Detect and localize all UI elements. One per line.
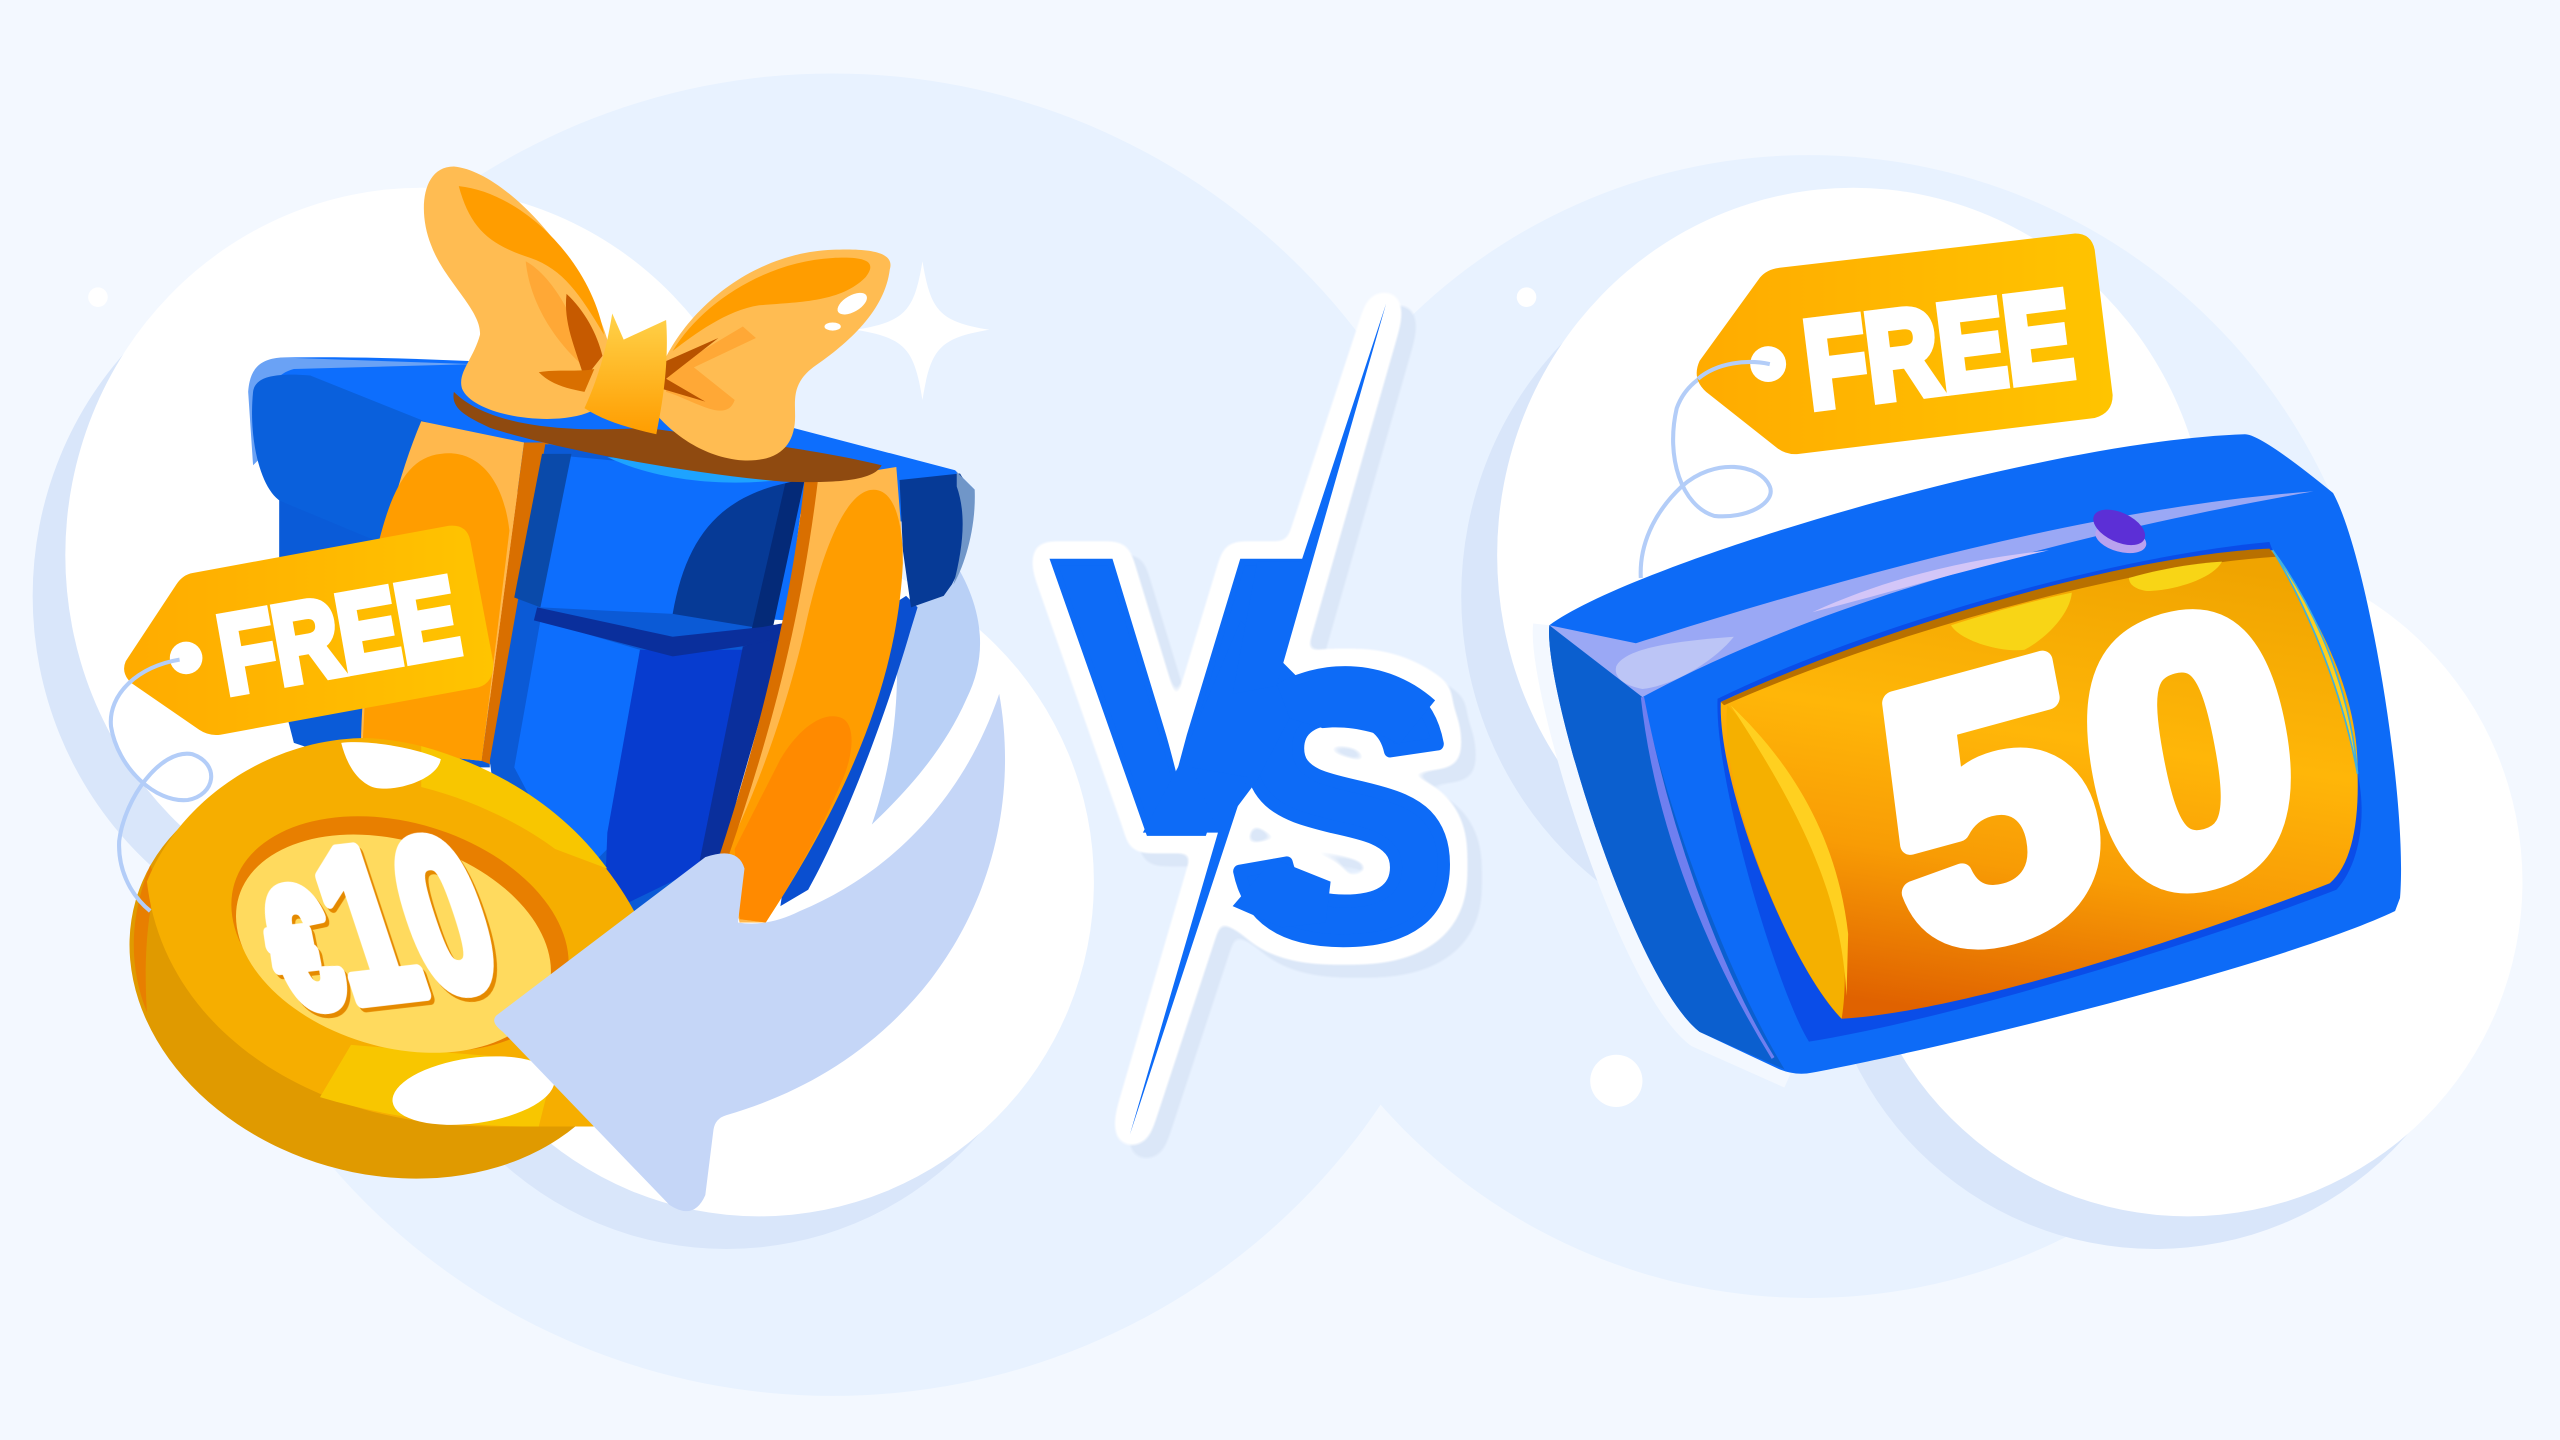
lid cyan highlight (607, 457, 800, 483)
left white backdrop (33, 188, 1094, 1249)
right ribbon inner (728, 490, 903, 922)
box front lower left (514, 620, 640, 882)
tag string (111, 660, 211, 911)
coin face (147, 738, 640, 1127)
tag string (1641, 363, 1771, 578)
soft swoosh behind gift (872, 555, 980, 824)
lid top band (278, 357, 975, 522)
drum highlight one (1951, 593, 2072, 650)
tag text: FREE (1797, 265, 2080, 435)
chest pink highlight (1812, 550, 2049, 612)
chest halo (1549, 625, 1791, 1073)
tag hole (1750, 346, 1786, 382)
bow right fold (666, 327, 756, 411)
S upper terminal swoosh (1277, 666, 1435, 744)
drum highlight two (2129, 562, 2222, 591)
bow left tail fold (566, 294, 602, 379)
rear body of box (279, 490, 490, 767)
bow left lower fold (539, 369, 594, 392)
tag string end (1698, 362, 1770, 379)
right ribbon dark edge (718, 477, 818, 859)
V letter: V (1051, 478, 1303, 917)
lower right body side (780, 596, 918, 906)
coin inner ring (202, 777, 598, 1091)
coin highlight lower (320, 1045, 555, 1127)
box front lower right (604, 650, 743, 914)
lower lightning spike (1130, 767, 1247, 1135)
chest lid light strip (1549, 491, 2313, 697)
lid right strip (748, 478, 805, 653)
drum right streak (2273, 550, 2358, 774)
coin edge (80, 706, 687, 1237)
chest body (1549, 434, 2401, 1074)
right white backdrop (1461, 188, 2522, 1249)
drum left streak (1731, 705, 1848, 996)
lid left face (252, 375, 441, 542)
bow right loop (658, 249, 890, 461)
lid lower shadow band (534, 607, 816, 656)
coin dark rim (134, 865, 157, 1012)
chest lid highlight (1616, 637, 1734, 689)
S lower terminal swoosh (1233, 859, 1331, 927)
curved arrow (494, 694, 1005, 1211)
tag shape (124, 526, 493, 735)
coin amount: €10 (227, 792, 523, 1054)
V to S joint (1143, 620, 1306, 833)
lid front face (540, 454, 805, 620)
bow left loop (424, 167, 611, 419)
tag shape (1697, 233, 2113, 454)
sparkles and dots (88, 261, 2418, 1109)
lid front dark right (673, 483, 787, 629)
spins chest (1549, 434, 2401, 1074)
bow right loop inner (673, 258, 870, 351)
bow left fold (526, 261, 591, 372)
S letter: S (1229, 606, 1457, 1016)
coin shine top (341, 742, 441, 789)
coin shine bottom (388, 1047, 559, 1134)
tag text: FREE (209, 553, 467, 718)
gift box (248, 167, 980, 1012)
bow shadow on lid (453, 392, 882, 482)
spinning drum (1721, 550, 2358, 1019)
chest lock (2088, 502, 2151, 558)
background blobs (171, 73, 2380, 1396)
chest window (1717, 542, 2362, 1042)
bow right dark fold (661, 338, 718, 402)
left ribbon inner (362, 453, 509, 761)
bow left loop inner (459, 186, 604, 335)
box front body (490, 444, 805, 1012)
right lid pale edge (953, 472, 975, 584)
coin (80, 706, 687, 1237)
lid highlight (248, 358, 473, 465)
VS emblem (1051, 304, 1457, 1135)
left FREE tag (111, 526, 493, 911)
chest left face (1549, 625, 1784, 1069)
right ribbon lower shade (735, 716, 852, 922)
coin inner disc (209, 798, 578, 1089)
left ribbon dark edge (482, 442, 549, 767)
left ribbon (361, 421, 524, 761)
free spins number: 50 (1852, 524, 2328, 1034)
lid front left strip (514, 454, 571, 607)
bow shine (824, 288, 870, 331)
upper lightning spike (1233, 304, 1386, 694)
right FREE tag (1641, 233, 2113, 578)
chest left purple strip (1642, 697, 1773, 1058)
drum top edge (1721, 549, 2276, 705)
box right dark strip (699, 637, 784, 865)
drum left cap (1726, 705, 1845, 1019)
right lid face (900, 473, 973, 607)
right ribbon (723, 467, 903, 922)
coin highlight upper right (421, 746, 607, 869)
tag hole (170, 642, 202, 674)
bow knot (584, 313, 667, 434)
